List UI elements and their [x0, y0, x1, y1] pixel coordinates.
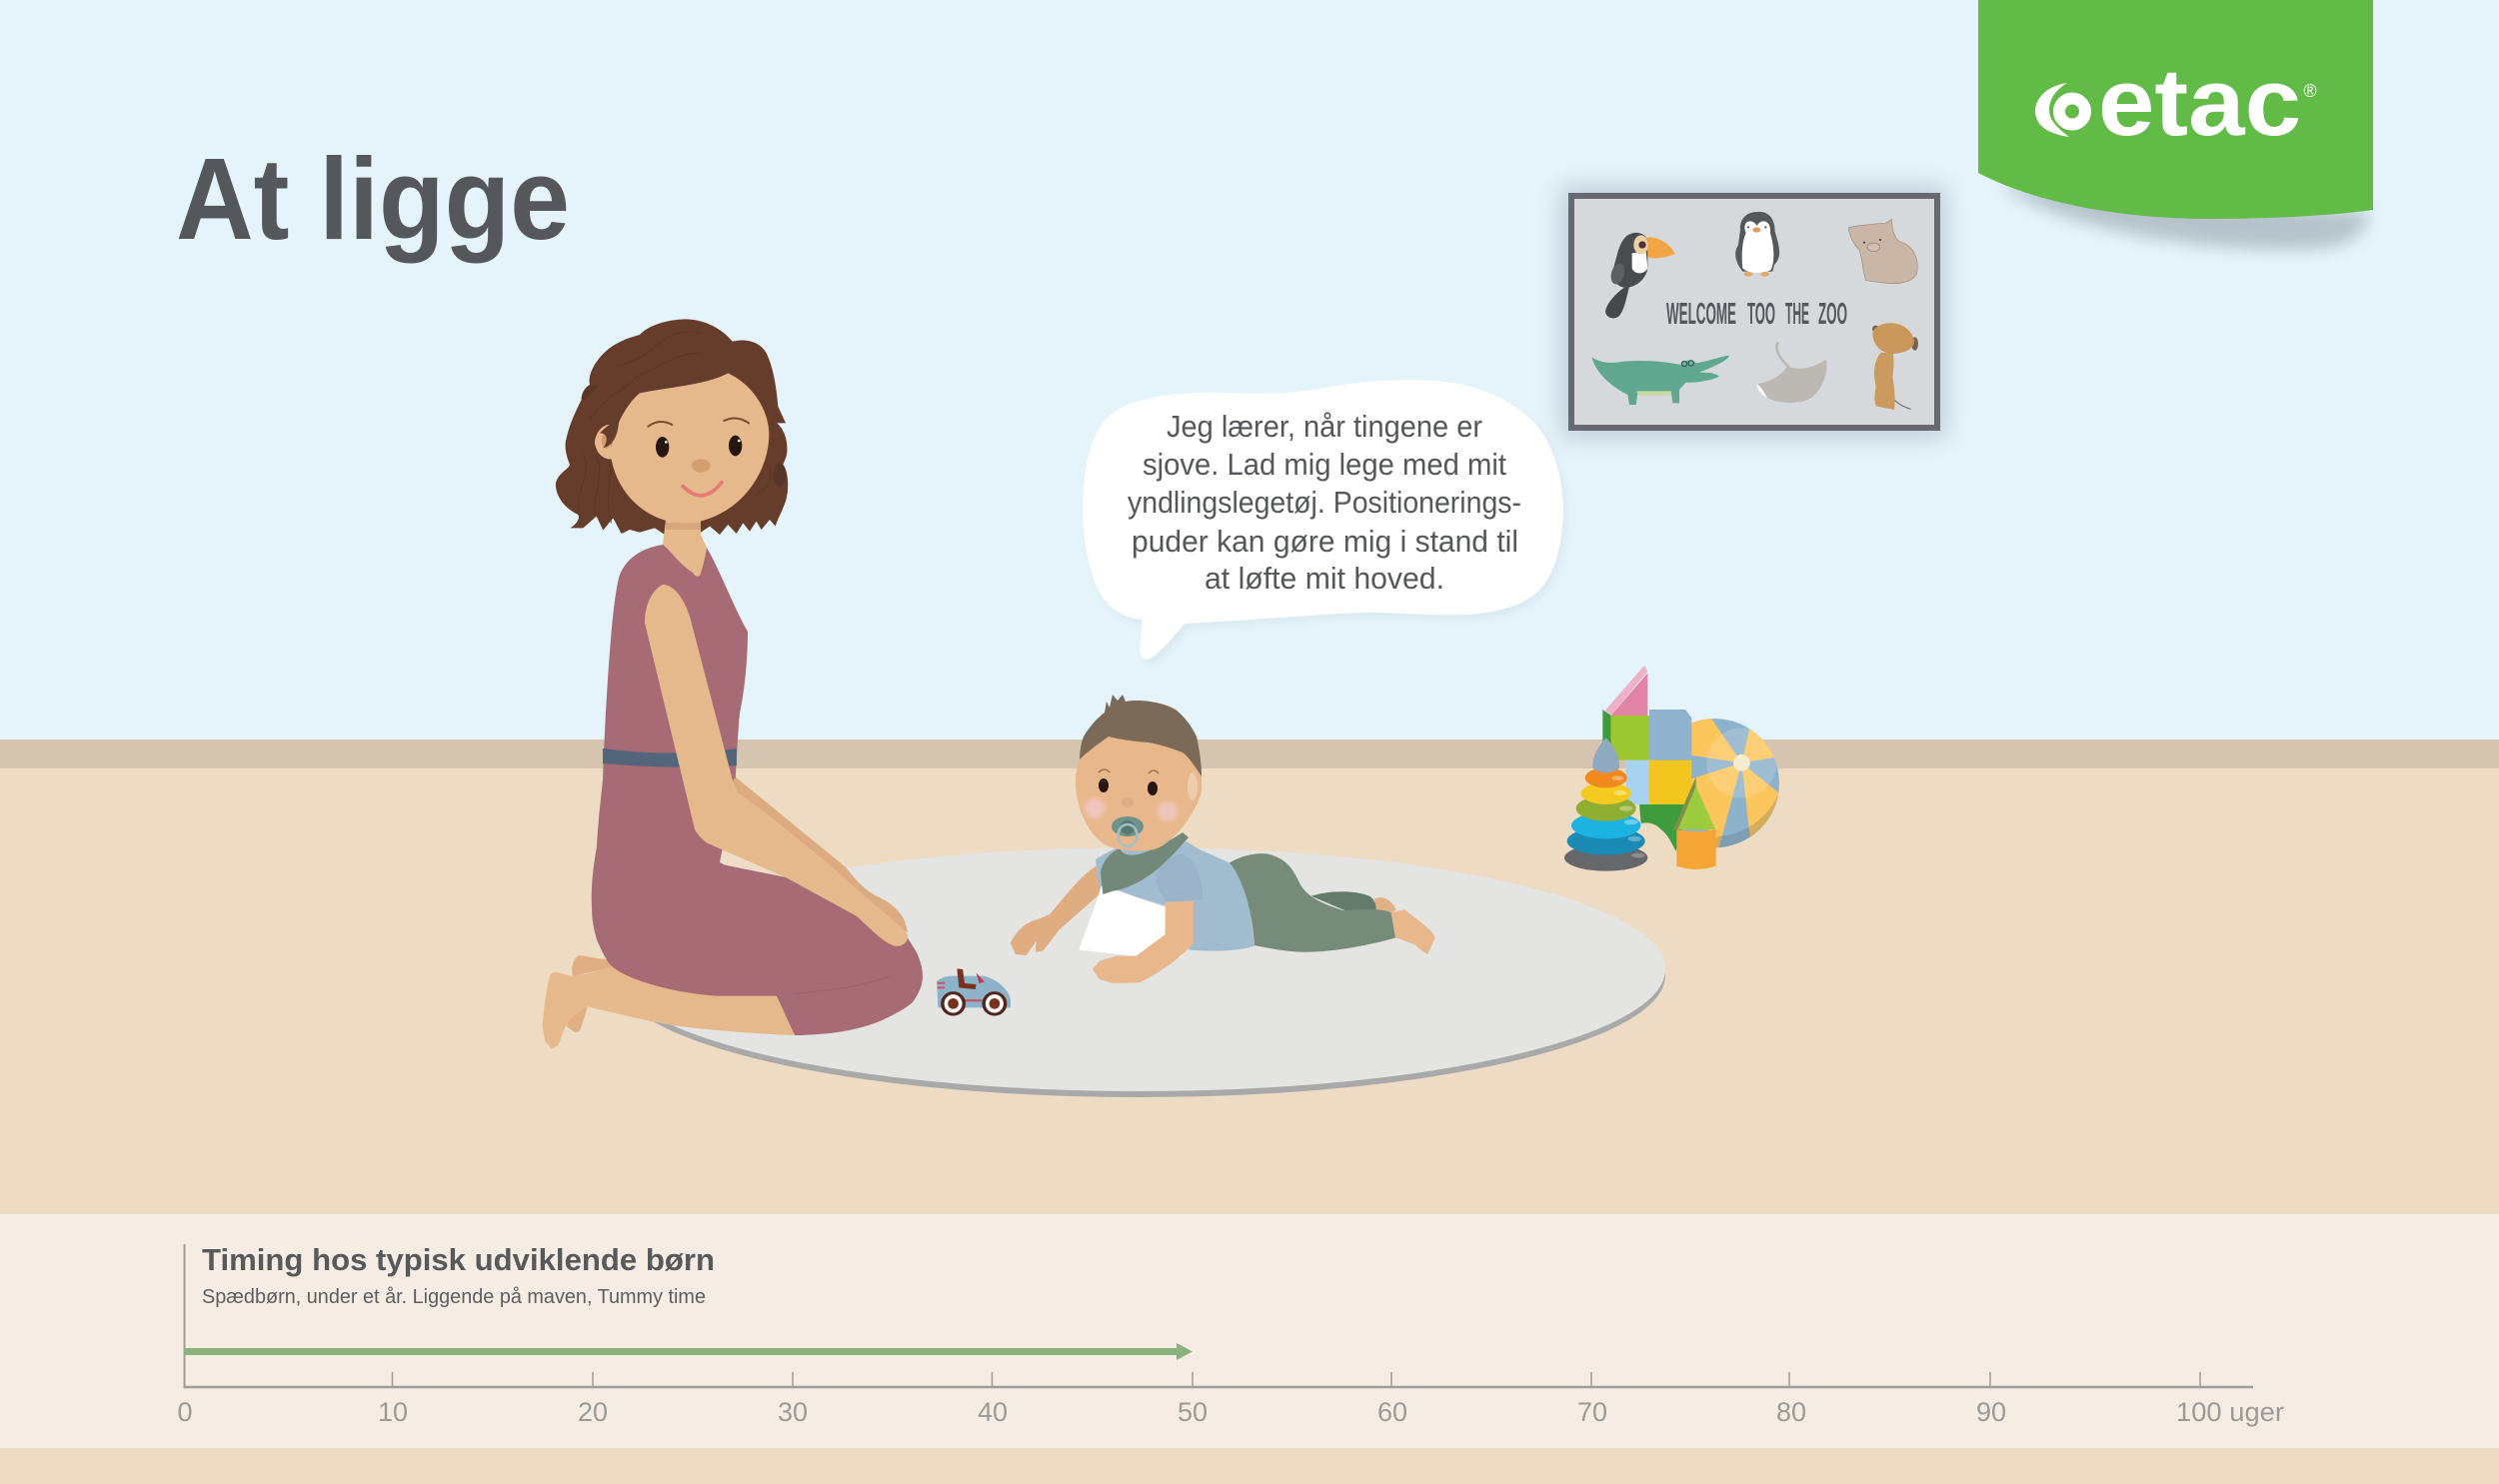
toy car	[937, 968, 1011, 1014]
nose	[692, 459, 711, 473]
pacifier	[1112, 816, 1144, 846]
blocks	[1602, 666, 1691, 851]
axis labels: 90	[1976, 1397, 2006, 1427]
face skin	[611, 373, 769, 524]
neck	[663, 520, 707, 585]
axis labels: 30	[778, 1397, 808, 1427]
logo: etac	[1978, 0, 2373, 250]
baby cheeks	[1085, 798, 1178, 821]
axis labels: 0	[177, 1397, 193, 1427]
back foot	[567, 955, 612, 1032]
axis labels: 60	[1377, 1397, 1407, 1427]
floor gap between arm and lap	[720, 847, 787, 877]
framed poster	[1561, 186, 1946, 438]
timeline panel	[0, 1214, 2499, 1448]
toys: stacker, blocks, ball	[1564, 666, 1782, 871]
trousers	[1230, 853, 1395, 952]
axis labels: 70	[1577, 1397, 1607, 1427]
dress hem crease	[795, 976, 892, 993]
toucan	[1605, 233, 1675, 318]
poster caption: WELCOME	[1666, 296, 1736, 331]
logo symbol	[2035, 83, 2085, 137]
baby ear	[1188, 772, 1198, 800]
rug	[614, 847, 1665, 1097]
far arm	[733, 777, 908, 932]
ring stacker	[1564, 738, 1647, 871]
bubble text: puder kan gøre mig i stand til	[1132, 524, 1518, 559]
timeline subtitle: Spædbørn, under et år. Liggende på maven, Tummy time	[202, 1285, 706, 1308]
baby	[1011, 695, 1435, 983]
speech bubble	[1083, 380, 1567, 665]
back foot	[1374, 897, 1396, 916]
poster caption: TOO	[1747, 296, 1775, 331]
bib	[1101, 832, 1189, 894]
axis labels: 50	[1178, 1397, 1208, 1427]
hair	[1080, 695, 1202, 776]
bubble text: sjove. Lad mig lege med mit	[1143, 447, 1506, 482]
back leg	[1311, 891, 1376, 911]
crocodile	[1591, 356, 1729, 405]
pillow	[1079, 886, 1183, 959]
near arm	[645, 585, 908, 946]
penguin	[1735, 212, 1779, 277]
cone and cylinder	[1673, 776, 1716, 869]
framed poster: ZOO	[1818, 296, 1847, 331]
registered mark: ®	[2303, 81, 2317, 101]
meerkat	[1872, 323, 1918, 410]
hair curl over ear	[600, 420, 619, 448]
front foot	[1391, 909, 1435, 954]
head hair	[556, 319, 788, 535]
dress	[592, 545, 923, 1035]
ball	[1650, 718, 1782, 852]
logo wordmark: etac	[2098, 49, 2301, 156]
near leg and foot	[543, 966, 795, 1048]
woman	[543, 319, 923, 1048]
stingray	[1756, 343, 1827, 403]
axis labels: 40	[978, 1397, 1008, 1427]
bubble text	[1128, 409, 1521, 596]
wall	[0, 0, 2499, 740]
smile	[683, 483, 722, 496]
far arm	[1011, 866, 1102, 955]
bubble text: Jeg lærer, når tingene er	[1167, 409, 1482, 444]
head	[1076, 730, 1202, 851]
baby eyes	[1099, 769, 1159, 795]
baby body	[1011, 832, 1435, 983]
axis labels: 20	[578, 1397, 608, 1427]
sleeve	[1156, 854, 1203, 902]
green duration arrow	[184, 1343, 1193, 1360]
bubble text: at løfte mit hoved.	[1205, 561, 1444, 596]
axis	[184, 1244, 2253, 1388]
near arm	[1093, 901, 1194, 983]
bubble text: yndlingslegetøj. Positionerings-	[1128, 485, 1521, 520]
eyes	[648, 418, 749, 458]
torso	[1096, 839, 1254, 951]
axis labels	[177, 1397, 2284, 1427]
axis labels: 100 uger	[2176, 1397, 2284, 1427]
belt	[603, 748, 737, 767]
axis labels: 10	[378, 1397, 408, 1427]
poster caption: THE	[1785, 296, 1809, 331]
neck shadow	[666, 523, 701, 530]
poster animals	[1591, 212, 1918, 410]
timeline heading: Timing hos typisk udviklende børn	[202, 1242, 715, 1277]
floor	[0, 768, 2499, 1484]
ear	[595, 425, 612, 459]
axis labels: 80	[1776, 1397, 1806, 1427]
title: At ligge	[176, 134, 570, 264]
skirting board	[0, 740, 2499, 768]
wombat	[1848, 219, 1917, 284]
baby nose	[1122, 797, 1134, 807]
face	[595, 373, 769, 524]
lower body limbs	[543, 585, 908, 1048]
